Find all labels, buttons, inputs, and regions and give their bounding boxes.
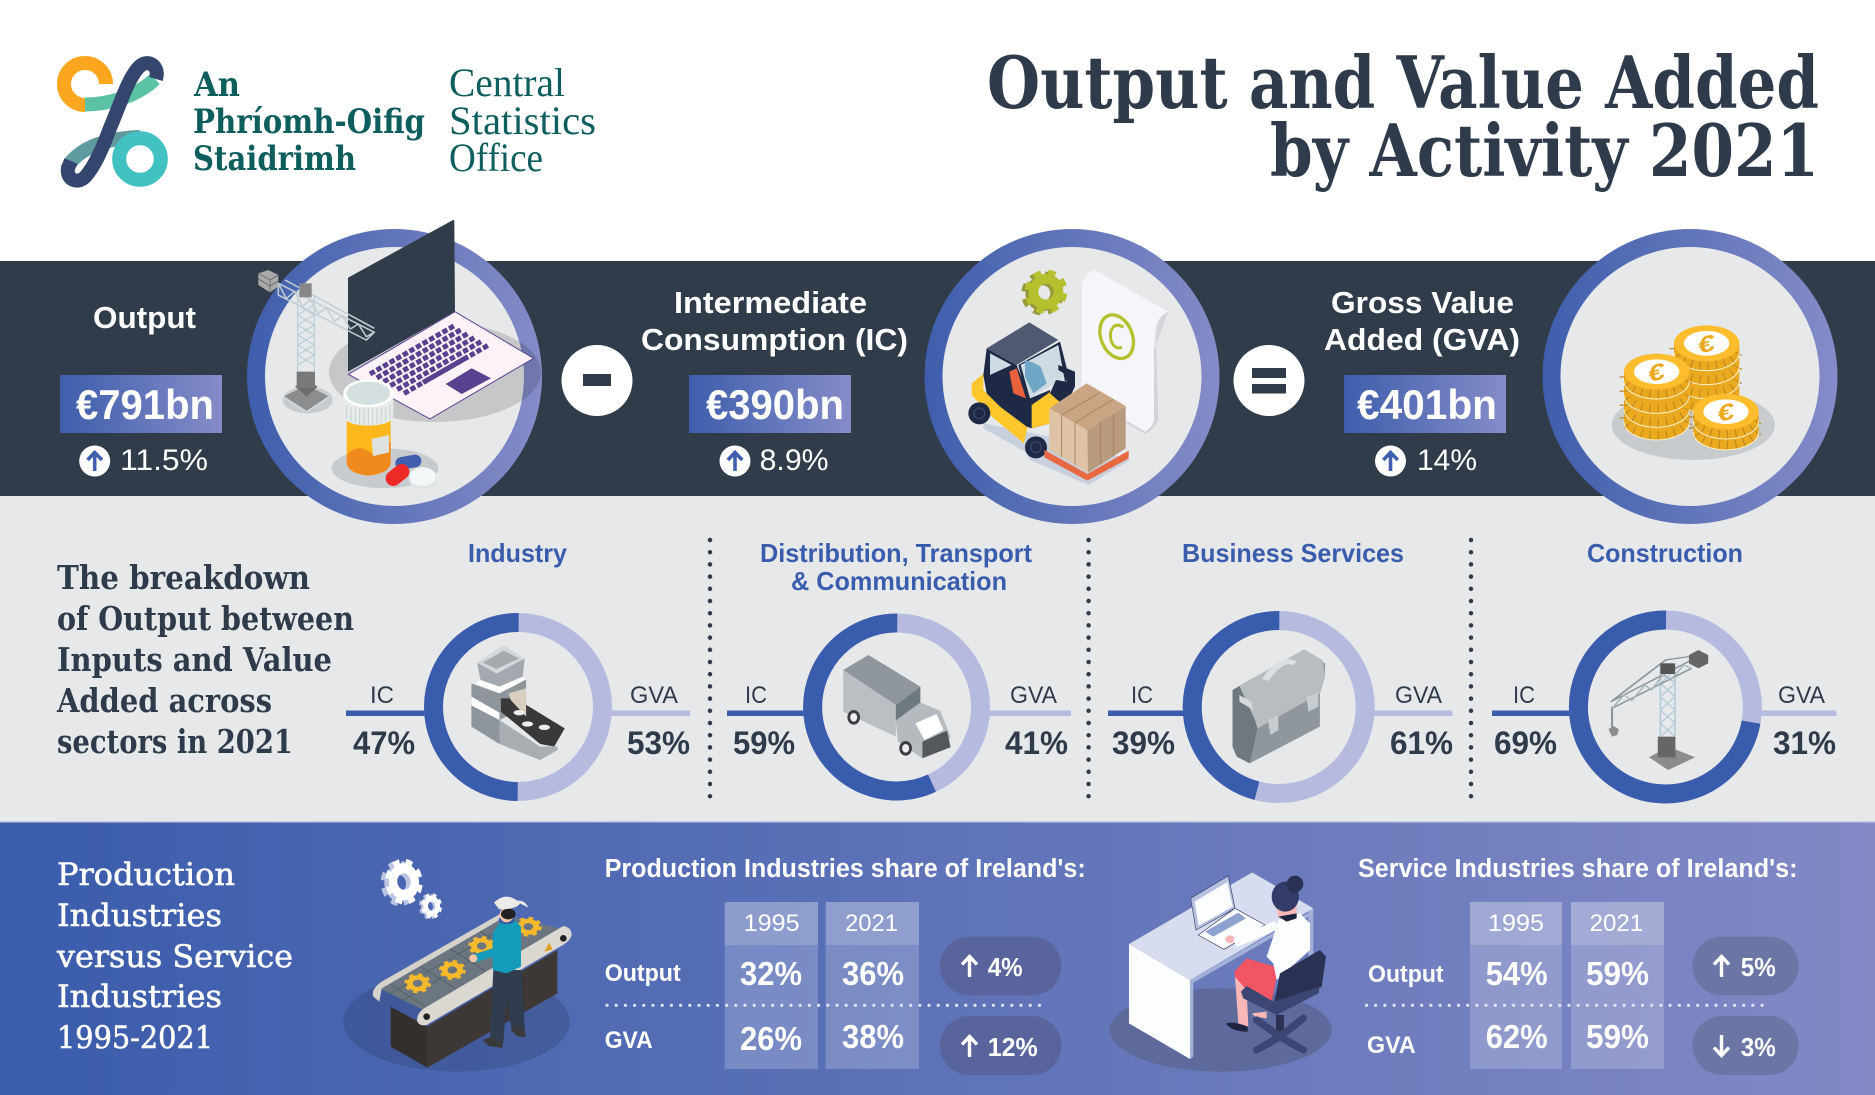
logo text: English name: Central [449,60,565,105]
equation: Output: Output [93,300,196,335]
panel: production versus service industries [0,821,1875,1095]
table: Service Industries share: Output [1368,961,1444,988]
heading: breakdown description: of Output between [57,599,354,638]
sector: Business Services [1108,538,1453,794]
change pill: GVA down 3%: 3% [1741,1032,1776,1062]
illustration circle: euro coin stacks: € [1698,329,1715,359]
change: up 11.5%: 11.5% [120,444,208,477]
logo text: English name [449,60,596,180]
operator: equals [1234,345,1304,416]
panel: sector breakdown [0,496,1875,822]
equation: Intermediate Consumption: Consumption (IC) [641,322,908,357]
heading: Production Industries versus Service Industries 1995-2021: 1995-2021 [57,1020,213,1056]
table: Service Industries share: 2021 [1590,910,1643,937]
equation: Gross Value Added [1324,285,1520,477]
logo text: Irish name: Staidrimh [193,139,356,179]
table: Production Industries share: 32% [740,955,802,992]
sector: Distribution, Transport & Communication: IC [745,682,767,709]
logo text: Irish name: An [193,65,240,105]
table: Service Industries share: 59% [1586,1018,1649,1055]
donut chart: Construction IC 69% GVA 31% [1578,620,1752,794]
heading: breakdown description: sectors in 2021 [57,722,293,761]
change: up 8.9%: 8.9% [760,444,829,477]
laptop keyboard [370,326,491,394]
icon: tower crane [1608,650,1708,770]
illustration circle: euro coin stacks: € [1718,397,1734,428]
panel: equation band [0,220,1875,524]
sector: Industry [346,538,690,792]
table: Service Industries share: 54% [1486,955,1548,992]
change pill: GVA down 3% [1693,1016,1799,1075]
sector: Distribution, Transport & Communication: GVA [1010,682,1057,709]
sector: Business Services: IC [1131,682,1153,709]
equation: Gross Value Added: Gross Value [1331,285,1514,320]
table: Production Industries share [605,855,1086,1075]
heading: Production Industries versus Service Industries 1995-2021: Industries [57,898,222,934]
operator: minus [562,345,632,416]
change pill: Output up 4% [940,937,1061,995]
illustration circle: forklift, gear and document [924,229,1220,524]
illustration circle: euro coin stacks [1542,229,1838,524]
sector: Construction: 31% [1773,725,1836,761]
table: Service Industries share: Service Industries share of Ireland's: [1358,855,1798,883]
sector: Business Services: GVA [1395,682,1442,709]
sector: Industry: Industry [468,538,568,568]
equation: Output [60,300,222,477]
heading: Production Industries versus Service Industries 1995-2021: versus Service [56,939,293,975]
sector: Industry: GVA [630,682,678,709]
change pill: Output up 4%: 4% [988,952,1023,982]
table: Service Industries share: 62% [1486,1018,1548,1055]
sector: Business Services: Business Services [1182,538,1404,568]
table: Production Industries share: 26% [740,1020,802,1057]
panel: header [64,40,1819,193]
change pill: GVA up 12%: 12% [988,1032,1038,1062]
value: €791bn: €791bn [76,381,214,428]
illustration: woman working at desk with laptop [1110,872,1332,1072]
sector: Distribution, Transport & Communication [727,538,1071,791]
equation: Intermediate Consumption [641,285,908,477]
heading: Production Industries versus Service Industries 1995-2021: Industries [57,979,222,1015]
sector: Business Services: 61% [1390,725,1453,761]
sector: Construction: IC [1513,682,1535,709]
table: Production Industries share: Production Industries share of Ireland's: [605,855,1086,883]
icon: CSO logo mark [64,63,161,181]
sector: Industry: IC [370,682,394,709]
heading: breakdown description: The breakdown [57,558,310,597]
table: Production Industries share: Output [605,960,681,987]
logo [64,60,596,181]
value: €401bn: €401bn [1357,381,1497,428]
sector: Construction: 69% [1494,725,1557,761]
change: up 11.5% [79,444,208,477]
heading: Production Industries versus Service Industries 1995-2021 [56,857,293,1056]
icon: briefcase [1233,649,1325,763]
change pill: Output up 5%: 5% [1741,952,1776,982]
donut chart: Distribution IC 59% GVA 41% [813,623,981,791]
sector: Distribution, Transport & Communication: Distribution, Transport [760,538,1032,568]
logo text: Irish name [193,65,425,179]
table: Production Industries share: 1995 [744,910,800,937]
sector: Industry: 47% [353,725,415,761]
table: Production Industries share: 38% [842,1018,904,1055]
title [987,40,1819,193]
table: Service Industries share [1358,855,1799,1075]
table: Production Industries share: GVA [605,1027,653,1054]
sector: Distribution, Transport & Communication: 41% [1005,725,1068,761]
change: up 8.9% [720,444,829,477]
pill bottle and capsules [332,379,438,489]
logo text: English name: Office [449,135,543,180]
construction crane [258,270,374,413]
sector: Construction: Construction [1587,538,1743,568]
heading: breakdown description: Added across [56,681,272,720]
illustration circle: euro coin stacks: € [1649,357,1665,388]
equation: Gross Value Added: Added (GVA) [1324,322,1520,357]
table: Service Industries share: 1995 [1488,910,1544,937]
sector: Construction [1492,538,1836,794]
donut chart: Business Services IC 39% GVA 61% [1192,620,1365,794]
sector: Business Services: 39% [1112,725,1175,761]
sector: Construction: GVA [1778,682,1825,709]
table: Service Industries share: 59% [1586,955,1649,992]
sector: Industry: 53% [627,725,690,761]
heading: breakdown description: Inputs and Value [57,640,332,679]
table: Service Industries share: GVA [1367,1032,1416,1059]
logo text: English name: Statistics [449,98,596,143]
donut chart: Industry IC 47% GVA 53% [434,622,602,792]
icon: delivery truck [843,655,951,758]
sector: Distribution, Transport & Communication: & Communication [791,566,1007,596]
change pill: GVA up 12% [940,1016,1061,1075]
heading: breakdown description [56,558,354,761]
heading: Production Industries versus Service Industries 1995-2021: Production [57,857,235,893]
equation: Intermediate Consumption: Intermediate [674,285,867,320]
change: up 14%: 14% [1417,444,1477,477]
icon: industrial machine [471,645,565,760]
change pill: Output up 5% [1693,937,1799,995]
table: Production Industries share: 2021 [845,910,898,937]
illustration circle: laptop, crane and medicine [247,220,542,524]
illustration: worker at conveyor belt with gears [343,859,572,1072]
change: up 14% [1375,444,1477,477]
sector: Distribution, Transport & Communication: 59% [733,725,795,761]
table: Production Industries share: 36% [842,955,904,992]
logo text: Irish name: Phríomh-Oifig [193,102,425,142]
value: €390bn: €390bn [706,381,844,428]
